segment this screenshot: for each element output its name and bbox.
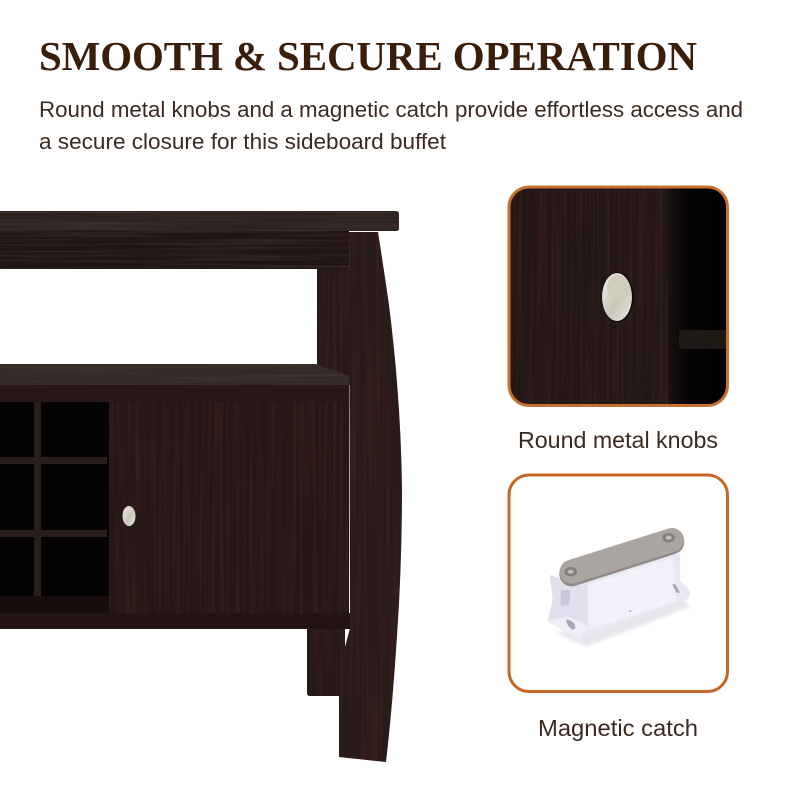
side panel [339, 232, 402, 762]
sideboard product illustration [0, 211, 402, 762]
caption: magnetic catch: Magnetic catch [538, 715, 698, 741]
description text: Round metal knobs and a magnetic catch provide effortless access and [39, 97, 743, 122]
panel: round metal knob close-up [509, 187, 728, 406]
metal plate [572, 542, 672, 574]
panel: magnetic catch [509, 475, 728, 692]
orange frame [509, 187, 728, 406]
title: SMOOTH & SECURE OPERATION [39, 33, 697, 79]
wine rack cubbies [0, 402, 109, 614]
white background and frame [509, 475, 728, 692]
apron [0, 231, 349, 269]
bottom rail [0, 613, 351, 629]
inner side panel [317, 269, 350, 385]
caption: round metal knobs: Round metal knobs [518, 427, 718, 453]
door knob [122, 506, 136, 526]
description text: a secure closure for this sideboard buffet [39, 129, 446, 154]
dark wood photo [509, 187, 728, 406]
table top [0, 211, 399, 231]
magnetic catch illustration [547, 533, 690, 647]
rear leg [307, 628, 345, 696]
shelf front edge [0, 385, 349, 402]
description text [39, 97, 743, 154]
shelf surface [0, 364, 349, 386]
knob [602, 272, 634, 322]
cabinet door [109, 402, 349, 613]
